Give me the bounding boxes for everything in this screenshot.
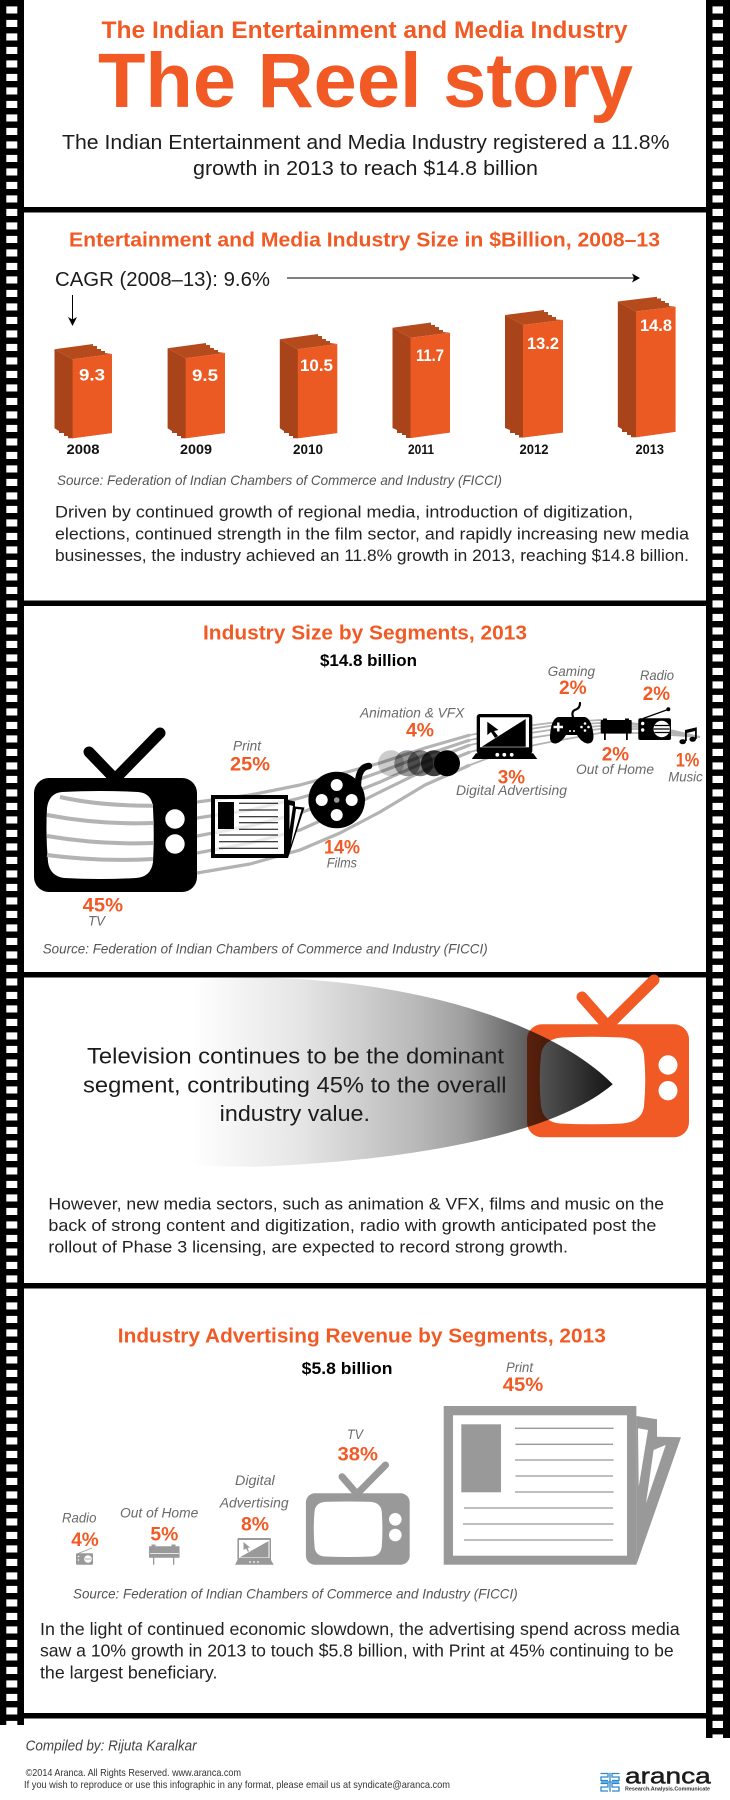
bar 2012 <box>505 310 563 438</box>
total value: $5.8 billion <box>302 1360 392 1378</box>
icon: laptop <box>472 714 537 759</box>
bar 2011 <box>392 322 450 438</box>
panel: industry size by segments <box>34 621 703 956</box>
panel: title header <box>62 17 670 180</box>
bar year labels: 2009 <box>180 441 212 457</box>
bar 2008 <box>54 344 112 438</box>
intro text: The Indian Entertainment and Media Industry registered a 11.8% <box>62 131 670 154</box>
title: kicker: The Indian Entertainment and Media Industry <box>102 17 628 44</box>
label: out of home <box>576 744 654 777</box>
bar 2011: 11.7 <box>416 347 444 365</box>
source note: Source: Federation of Indian Chambers of Commerce and Industry (FICCI) <box>57 472 502 488</box>
labels: advertising shares <box>62 1359 543 1551</box>
label: gaming: Gaming <box>548 663 595 679</box>
film strip: right edge <box>706 0 730 1738</box>
bar 2013: 14.8 <box>640 317 672 335</box>
gradient beam <box>190 978 613 1167</box>
paragraph: new media growth: rollout of Phase 3 licensing, are expected to record strong growth. <box>48 1238 568 1257</box>
label: animation <box>359 704 465 742</box>
label: TV: TV <box>347 1426 364 1442</box>
title: main: The Reel story <box>98 38 633 124</box>
icon: grey billboard <box>150 1544 179 1565</box>
frame dividers <box>24 207 706 1718</box>
logo: aranca <box>600 1763 711 1793</box>
label: films <box>324 836 360 870</box>
bar 2009 <box>168 343 225 438</box>
intro text <box>62 131 670 180</box>
label: music: 1% <box>676 750 699 772</box>
icon: animation circles <box>378 750 460 776</box>
label: print: 25% <box>230 754 270 776</box>
logo: aranca: Research.Analysis.Communicate <box>625 1787 710 1793</box>
label: music <box>668 750 703 785</box>
label: out of home: Out of Home <box>120 1505 199 1521</box>
label: TV: TV <box>88 913 107 929</box>
paragraph: new media growth <box>48 1194 664 1257</box>
icon: newspaper <box>213 797 304 858</box>
paragraph: new media growth: However, new media sectors, such as animation & VFX, films and music on the <box>48 1194 664 1213</box>
label: gaming <box>548 663 595 699</box>
label: digital advertising <box>219 1472 289 1536</box>
label: digital advertising: Advertising <box>219 1495 289 1511</box>
label: radio <box>640 667 674 705</box>
icon: music note <box>679 727 697 744</box>
paragraph: advertising spend: saw a 10% growth in 2013 to touch $5.8 billion, with Print at 45% continuing to be <box>40 1641 674 1661</box>
label: gaming: 2% <box>559 677 587 699</box>
bar chart <box>54 297 676 457</box>
source note: Source: Federation of Indian Chambers of Commerce and Industry (FICCI) <box>73 1585 518 1601</box>
label: print: Print <box>233 738 262 754</box>
panel: advertising revenue <box>40 1324 681 1682</box>
label: TV: 45% <box>83 895 123 917</box>
panel: television dominance <box>48 978 689 1257</box>
label: digital advertising: Digital <box>235 1472 276 1488</box>
label: TV: 38% <box>338 1444 378 1466</box>
heading: segments: Industry Size by Segments, 2013 <box>203 621 527 644</box>
label: out of home: 5% <box>150 1524 178 1546</box>
paragraph: growth drivers: elections, continued strength in the film sector, and rapidly increasing new media <box>55 524 690 543</box>
icon: black TV <box>34 733 197 892</box>
icon: billboard <box>601 718 632 740</box>
icon: orange TV <box>527 980 689 1137</box>
arrow: CAGR down <box>68 295 77 326</box>
icon: grey laptop <box>235 1538 274 1565</box>
copyright notice: ©2014 Aranca. All Rights Reserved. www.aranca.com <box>26 1767 241 1779</box>
paragraph: advertising spend: In the light of continued economic slowdown, the advertising spend across media <box>40 1619 680 1639</box>
label: radio: 4% <box>71 1529 99 1551</box>
bar 2012: 13.2 <box>527 335 559 353</box>
arrow: CAGR horizontal <box>287 274 640 282</box>
label: films: Films <box>327 854 357 870</box>
paragraph: growth drivers <box>55 503 690 565</box>
panel: industry size 2008-13 <box>54 230 690 565</box>
label: digital advertising: 3% <box>498 766 525 788</box>
label: films: 14% <box>324 836 360 858</box>
callout: TV share: Television continues to be the dominant <box>87 1043 505 1068</box>
bar year labels: 2013 <box>636 441 664 457</box>
icon: game controller <box>550 703 594 744</box>
label: print: Print <box>506 1359 534 1375</box>
icon: film reel <box>308 766 369 828</box>
paragraph: advertising spend <box>40 1619 680 1682</box>
label: radio <box>62 1510 99 1551</box>
icon: grey TV <box>306 1465 410 1565</box>
logo: aranca: aranca <box>625 1763 711 1788</box>
bar 2010 <box>280 334 337 438</box>
heading: advertising revenue: Industry Advertising Revenue by Segments, 2013 <box>118 1324 606 1347</box>
label: radio: 2% <box>643 683 670 705</box>
paragraph: advertising spend: the largest beneficiary. <box>40 1662 217 1682</box>
label: radio: Radio <box>62 1510 97 1526</box>
label: digital advertising <box>456 766 567 798</box>
total value: $14.8 billion <box>320 652 417 670</box>
bar year labels: 2011 <box>408 441 434 457</box>
heading: industry size: Entertainment and Media Industry Size in $Billion, 2008–13 <box>69 230 660 252</box>
bar 2010: 10.5 <box>300 357 333 375</box>
callout: TV share <box>83 1043 506 1126</box>
bar year labels: 2008 <box>66 441 100 457</box>
label: print <box>503 1359 543 1396</box>
CAGR label: CAGR (2008–13): 9.6% <box>55 268 270 291</box>
label: animation: Animation & VFX <box>359 704 465 720</box>
label: music: Music <box>668 769 703 785</box>
label: digital advertising: 8% <box>241 1514 269 1536</box>
copyright notice <box>24 1767 450 1791</box>
film strip: left edge <box>0 0 24 1725</box>
bar 2013 <box>618 297 676 437</box>
label: radio: Radio <box>640 667 674 683</box>
icon: radio <box>638 707 671 740</box>
label: TV <box>338 1426 378 1466</box>
bar year labels: 2012 <box>520 441 549 457</box>
label: TV <box>83 895 123 929</box>
bar 2008: 9.3 <box>79 367 105 385</box>
bar year labels <box>66 441 664 457</box>
bar year labels: 2010 <box>293 441 323 457</box>
paragraph: growth drivers: Driven by continued growth of regional media, introduction of digitization, <box>55 503 633 522</box>
label: out of home: 2% <box>602 744 629 766</box>
callout: TV share: industry value. <box>220 1101 370 1126</box>
icon: grey radio <box>76 1548 93 1565</box>
intro text: growth in 2013 to reach $14.8 billion <box>193 157 538 180</box>
footer <box>24 1739 711 1793</box>
copyright notice: If you wish to reproduce or use this infographic in any format, please email us at syndicate@aranca.com <box>24 1779 450 1791</box>
icon: grey newspaper <box>444 1406 681 1565</box>
strands linking segments <box>197 720 700 873</box>
label: out of home <box>120 1505 199 1546</box>
paragraph: growth drivers: businesses, the industry achieved an 11.8% growth in 2013, reaching $14.8 billion. <box>55 546 689 565</box>
paragraph: new media growth: back of strong content and digitization, radio with growth anticipated post the <box>48 1216 656 1235</box>
label: digital advertising: Digital Advertising <box>456 782 567 798</box>
source note: Source: Federation of Indian Chambers of Commerce and Industry (FICCI) <box>43 940 488 956</box>
label: print <box>230 738 270 776</box>
label: animation: 4% <box>406 720 434 742</box>
credit: Compiled by: Rijuta Karalkar <box>26 1739 198 1755</box>
bar 2009: 9.5 <box>192 367 218 385</box>
label: print: 45% <box>503 1374 543 1396</box>
labels: segment shares <box>83 663 703 929</box>
callout: TV share: segment, contributing 45% to the overall <box>83 1072 506 1097</box>
label: out of home: Out of Home <box>576 761 654 777</box>
